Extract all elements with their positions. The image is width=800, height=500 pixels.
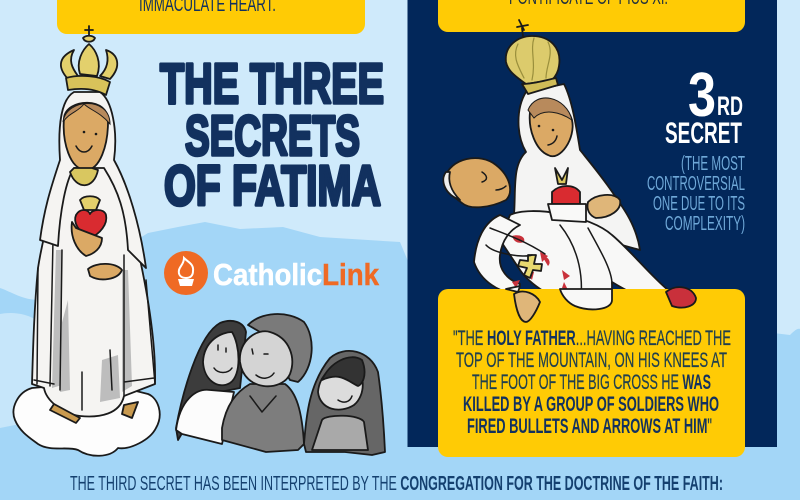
- text block: third secret note: (THE MOST: [681, 153, 745, 175]
- illustration: Our Lady holding wounded Pope: [443, 20, 668, 309]
- sacred heart: [75, 196, 106, 238]
- collar: [70, 168, 98, 185]
- cloud: [14, 382, 160, 456]
- text block: third secret note: COMPLEXITY): [665, 213, 745, 235]
- veil and robe: [514, 84, 640, 250]
- left child: [176, 321, 246, 444]
- hand and shoe overlap: [514, 292, 540, 322]
- logo: CatholicLink: CatholicLink: [213, 257, 380, 292]
- right child: [304, 351, 385, 455]
- title: [160, 52, 384, 218]
- blood and pectoral cross: [486, 228, 570, 290]
- title: SECRETS: [185, 104, 360, 168]
- crown: [506, 36, 559, 84]
- heading: 3rd secret: 3: [688, 61, 716, 130]
- face: [64, 103, 108, 170]
- robe shading: [52, 250, 132, 402]
- hands: [72, 222, 122, 279]
- panel: third secret navy background: [408, 0, 777, 447]
- illustration: three shepherd children: [176, 314, 385, 455]
- feet: [50, 402, 138, 423]
- heading: 3rd secret: [665, 61, 743, 150]
- robe: [32, 166, 155, 416]
- icon: flame logo: [164, 251, 208, 295]
- background mountains: [0, 222, 800, 500]
- heading: 3rd secret: SECRET: [665, 117, 742, 150]
- sacred heart: [552, 168, 580, 204]
- illustration: Our Lady with crown on cloud: [14, 26, 160, 456]
- text block: third secret note: [647, 153, 745, 235]
- crown: [61, 44, 117, 79]
- logo: CatholicLink: [164, 251, 380, 295]
- pope robe hem over box: [560, 289, 612, 309]
- veil: [40, 92, 146, 268]
- callout: quote yellow box: [438, 286, 745, 457]
- pope arm: [474, 215, 520, 292]
- heading: 3rd secret: RD: [717, 91, 743, 121]
- title: OF FATIMA: [164, 154, 381, 218]
- face: [530, 100, 573, 156]
- callout: top left yellow box: [57, 0, 365, 34]
- Mary hand: [587, 195, 620, 218]
- pope robe and legs: [500, 211, 668, 309]
- Pope head: [445, 158, 510, 207]
- callout: top right yellow box: [438, 0, 745, 32]
- middle adult: [222, 314, 312, 452]
- title: THE THREE: [160, 52, 384, 116]
